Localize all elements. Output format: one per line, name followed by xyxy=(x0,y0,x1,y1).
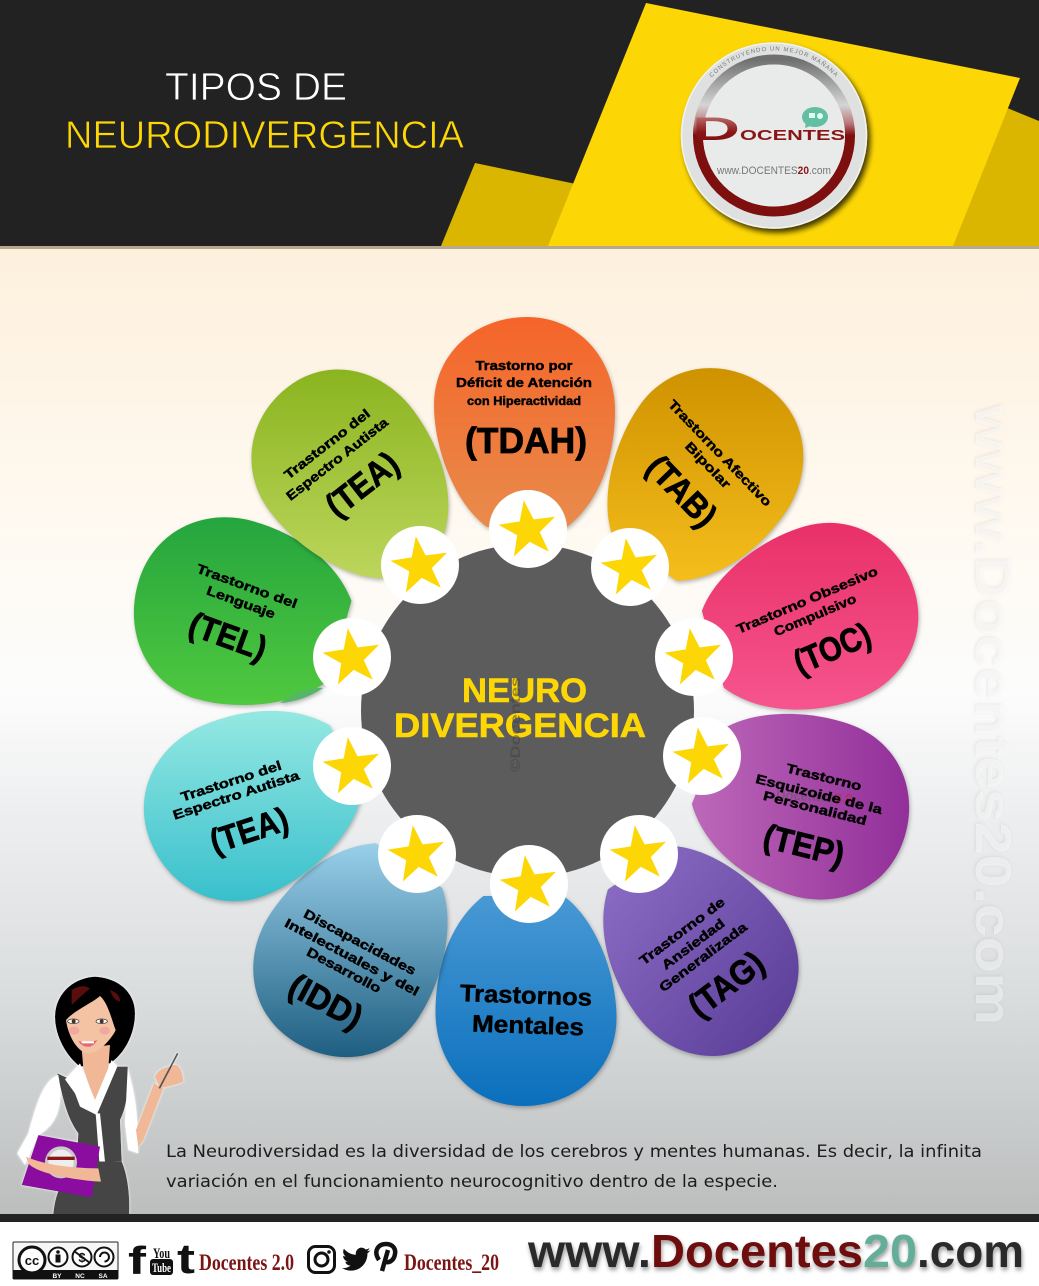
website address xyxy=(527,1225,1024,1277)
petal: TAB: Bipolar xyxy=(682,439,734,491)
label: Docentes_20: Docentes_20 xyxy=(404,1250,499,1275)
label: Docentes 2.0: Docentes 2.0 xyxy=(199,1250,294,1275)
petal: TAB: (TAB) xyxy=(639,448,724,535)
creative commons badge: cc xyxy=(25,1253,39,1268)
footer band xyxy=(0,1214,1039,1286)
icons: facebook, youtube, tumblr: f xyxy=(128,1240,147,1283)
logo: Docentes 2.0 badge: OCENTES xyxy=(740,127,845,144)
star badges xyxy=(313,490,741,923)
petal: TDAH: (TDAH) xyxy=(465,420,587,461)
central circle: DIVERGENCIA xyxy=(394,707,646,745)
petal: TDAH xyxy=(434,317,615,527)
petal: TAG: Generalizada xyxy=(656,919,751,995)
logo: Docentes 2.0 badge xyxy=(679,42,875,238)
petal: TAB: Trastorno Afectivo xyxy=(665,397,775,509)
petal: TOC xyxy=(687,502,939,734)
petal: IDD: Intelectuales y del xyxy=(282,915,422,999)
petal: TAG xyxy=(569,817,832,1089)
petal: TEP: (TEP) xyxy=(759,818,848,874)
character: teacher holding a purple folder xyxy=(17,977,183,1214)
creative commons badge: BY xyxy=(52,1273,62,1280)
petal: TEA teal xyxy=(117,681,380,928)
petal: TEA green xyxy=(217,335,482,608)
petal: TAG: (TAG) xyxy=(681,944,772,1025)
central circle: ©Docentes xyxy=(507,677,523,772)
description text: variación en el funcionamiento neurocognitivo dentro de la especie. xyxy=(166,1172,778,1191)
petal: TEP xyxy=(674,681,936,927)
petal: TAB xyxy=(569,333,839,609)
header band xyxy=(0,0,1039,249)
website address: 20 xyxy=(863,1225,917,1277)
petal: TOC: (TOC) xyxy=(788,616,877,682)
petal: Trastornos Mentales: Trastornos xyxy=(460,980,592,1012)
petal: TEL: Lenguaje xyxy=(205,583,277,621)
title: NEURODIVERGENCIA xyxy=(65,114,464,157)
title: TIPOS DE xyxy=(165,66,347,109)
title xyxy=(65,66,464,157)
creative commons badge: SA xyxy=(98,1273,108,1280)
petal: TEA teal: Trastorno del xyxy=(179,758,283,804)
petal: TEA green: Trastorno del xyxy=(281,406,373,482)
petal: TEL xyxy=(112,495,365,733)
website address: www. xyxy=(527,1225,651,1277)
logo: Docentes 2.0 badge: www.DOCENTES20.com xyxy=(716,165,831,177)
petal: TDAH: Déficit de Atención xyxy=(456,375,592,390)
website address: .com xyxy=(917,1225,1024,1277)
creative commons badge: $ xyxy=(78,1250,86,1265)
petal: TEP: Docentes2.0 xyxy=(776,787,853,806)
petal: TEA green: (TEA) xyxy=(319,444,407,525)
petal: TOC: Trastorno Obsesivo xyxy=(734,563,880,637)
icons: facebook, youtube, tumblr: Tube xyxy=(152,1260,171,1275)
page background xyxy=(0,249,1039,1214)
petal: TAG: Trastorno de xyxy=(636,894,728,968)
petal: TEL: (TEL) xyxy=(184,605,272,668)
petal: TEP: Personalidad xyxy=(762,788,868,828)
petal: Trastornos Mentales xyxy=(436,896,616,1106)
central circle xyxy=(361,544,694,877)
petal: TDAH: Trastorno por xyxy=(476,358,572,373)
petal: TEA green: Espectro Autista xyxy=(283,414,392,503)
icons: facebook, youtube, tumblr xyxy=(128,1235,195,1283)
description text xyxy=(166,1142,982,1191)
petal: Trastornos Mentales: Mentales xyxy=(472,1010,584,1041)
petal: IDD: Desarrollo xyxy=(304,944,384,996)
petal: TEP: Esquizoide de la xyxy=(754,771,885,817)
petal: TEA teal: (TEA) xyxy=(205,800,293,861)
petal: TDAH: con Hiperactividad xyxy=(467,396,581,408)
website address: Docentes xyxy=(651,1225,863,1277)
creative commons badge xyxy=(13,1242,118,1280)
petal: TEA teal: Espectro Autista xyxy=(171,767,302,823)
logo: Docentes 2.0 badge: D xyxy=(692,111,740,147)
creative commons badge: NC xyxy=(75,1273,85,1280)
petal: IDD: Discapacidades xyxy=(301,906,419,978)
icons: facebook, youtube, tumblr: You xyxy=(153,1246,170,1262)
petal: TEP: Trastorno xyxy=(785,760,863,794)
icons: facebook, youtube, tumblr: t xyxy=(177,1235,195,1282)
logo: Docentes 2.0 badge: CONSTRUYENDO UN MEJOR MAÑANA xyxy=(710,46,838,77)
petal: TAG: Ansiedad xyxy=(659,915,728,973)
petal: TOC: Compulsivo xyxy=(772,591,859,639)
petal: IDD xyxy=(218,816,486,1092)
petal: TEL: Trastorno del xyxy=(195,561,299,611)
icons: instagram, twitter, pinterest xyxy=(308,1244,395,1272)
watermark: vertical site name: www.Docentes20.com xyxy=(965,404,1021,1025)
central circle: NEURO xyxy=(462,672,587,710)
description text: La Neurodiversidad es la diversidad de los cerebros y mentes humanas. Es decir, la infinita xyxy=(166,1142,982,1161)
petal: IDD: (IDD) xyxy=(282,967,369,1037)
